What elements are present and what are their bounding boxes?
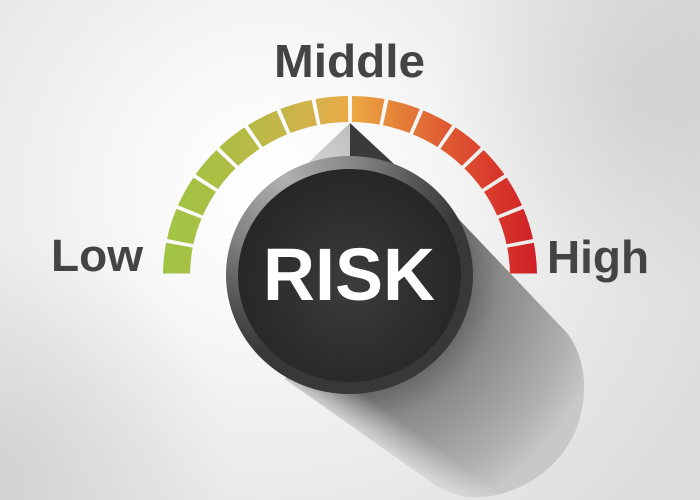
pointer light side [308, 123, 350, 170]
pointer dark side [350, 123, 394, 170]
knob ring [226, 156, 473, 394]
label: Middle: Middle [274, 35, 425, 87]
long shadow of the knob [285, 210, 584, 497]
knob face [238, 169, 461, 382]
label: High: High [547, 231, 649, 283]
knob text: RISK: RISK [263, 233, 435, 316]
label: Low: Low [51, 230, 144, 281]
knob pointer [308, 123, 394, 170]
risk gauge arc: 16 segments from green to red [160, 90, 540, 274]
knob [226, 156, 473, 394]
